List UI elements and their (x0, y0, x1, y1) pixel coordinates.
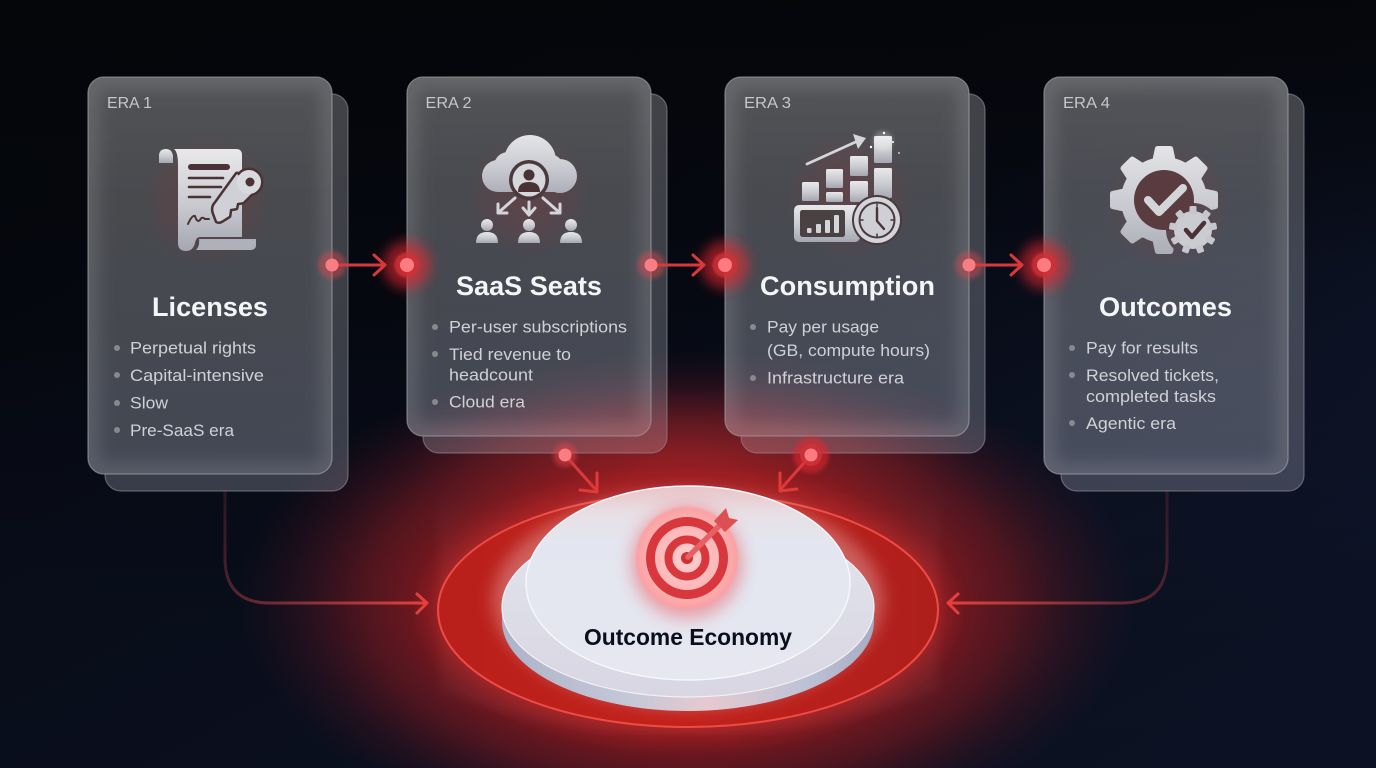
panel: era 4 outcomes (1044, 77, 1304, 491)
platform: outcome economy (434, 486, 942, 731)
list: outcomes bullets: Resolved tickets, (1086, 366, 1219, 385)
heading: consumption: Consumption (760, 271, 935, 301)
arrow: era 1 to outcome economy (225, 491, 427, 613)
list: saas seats bullets: Tied revenue to (449, 345, 571, 364)
panel: era 3 consumption (725, 77, 985, 453)
list: licenses bullets: Capital-intensive (130, 366, 264, 385)
card shell era 4 (1044, 77, 1304, 491)
list: saas seats bullets: headcount (449, 366, 533, 384)
label: outcome economy: Outcome Economy (584, 624, 792, 650)
lower disc (493, 492, 883, 711)
list: licenses bullets (114, 338, 264, 440)
panel: era 1 licenses (88, 77, 348, 491)
icon: gears with checkmarks (1110, 146, 1218, 254)
era label 1: ERA 1 (107, 95, 152, 112)
era label 2: ERA 2 (426, 95, 472, 112)
list: consumption bullets: (GB, compute hours) (767, 341, 930, 360)
list: consumption bullets (750, 318, 930, 388)
card shell era 1 (88, 77, 348, 491)
icon: usage chart with clock (786, 131, 914, 259)
card shell era 3 (725, 77, 985, 453)
upper disc (526, 486, 850, 680)
list: saas seats bullets: Per-user subscriptions (449, 318, 627, 336)
icon: cloud with users (476, 135, 582, 243)
era label 3: ERA 3 (744, 95, 791, 112)
glow: red tint on card bottoms (398, 385, 978, 525)
list: consumption bullets: Infrastructure era (767, 368, 905, 388)
list: saas seats bullets (432, 318, 627, 412)
heading: licenses: Licenses (152, 292, 268, 322)
icon: scroll with key (142, 134, 274, 266)
list: consumption bullets: Pay per usage (767, 318, 879, 336)
icon: target with arrow (631, 507, 743, 619)
arrow: era 2 to era 3 (637, 241, 749, 289)
list: outcomes bullets: Agentic era (1086, 414, 1177, 433)
panel: era 2 saas seats (407, 77, 667, 453)
red ellipse base (434, 489, 942, 731)
list: outcomes bullets: Pay for results (1086, 338, 1198, 358)
list: licenses bullets: Slow (130, 394, 169, 412)
arrow: era 1 to era 2 (318, 241, 431, 289)
card shell era 2 (407, 77, 667, 453)
heading: saas seats: SaaS Seats (456, 271, 602, 301)
arrow: era 3 to platform (780, 437, 829, 491)
arrow: era 4 to outcome economy (948, 491, 1167, 613)
era label 4: ERA 4 (1063, 95, 1110, 112)
arrow: era 2 to platform (553, 443, 597, 492)
heading: outcomes: Outcomes (1099, 292, 1232, 322)
list: outcomes bullets (1069, 338, 1219, 433)
list: licenses bullets: Perpetual rights (130, 338, 256, 358)
list: licenses bullets: Pre-SaaS era (130, 421, 235, 440)
arrow: era 3 to era 4 (955, 241, 1068, 289)
list: outcomes bullets: completed tasks (1086, 387, 1216, 406)
list: saas seats bullets: Cloud era (449, 392, 526, 412)
